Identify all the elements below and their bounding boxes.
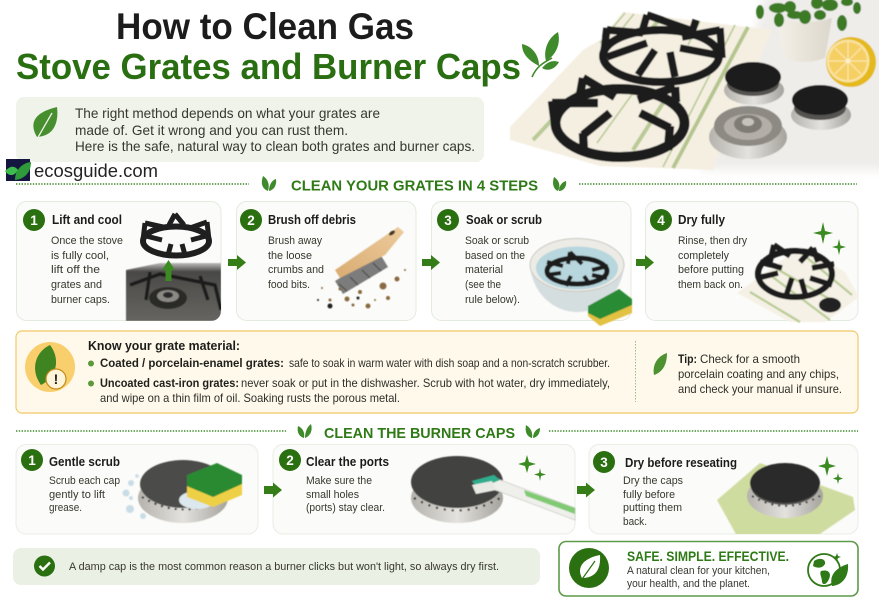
icon: leaf with warning [25,342,75,392]
step description: Dry the caps [623,475,683,487]
bullet: uncoated cast iron: and wipe on a thin film of oil. Soaking rusts the porous metal. [100,392,400,405]
icon: leaf [33,107,57,146]
heading: clean the burner caps: CLEAN THE BURNER CAPS [324,425,515,442]
material heading: Know your grate material: [88,338,240,353]
badge: 3: 3 [444,213,452,228]
badge: 3 [593,451,615,473]
pot [777,18,832,62]
plant [756,0,861,31]
illustration: bowl with grate and sponge [530,238,632,326]
step description [306,475,385,514]
icon: globe with leaf [808,553,848,586]
step description: Brush away [268,235,322,247]
banner text: SAFE. SIMPLE. EFFECTIVE. [627,548,789,564]
step description: putting them [623,502,682,514]
step description: Make sure the [306,475,372,487]
tip text: Check for a smooth [700,353,800,366]
title: Stove Grates and Burner Caps [16,46,521,87]
step description: (ports) stay clear. [306,502,385,514]
tip text: and check your manual if unsure. [678,383,842,396]
step description [51,235,123,306]
heading: clean your grates: CLEAN YOUR GRATES IN 4 STEPS [291,178,538,194]
callout: damp cap note [13,548,540,585]
arrow: up [162,260,175,281]
step description: grease. [49,502,82,514]
lemon [826,37,876,87]
arrow: cap step 1 to 2 [264,482,282,498]
step description: lift off the [51,264,100,276]
towel [510,12,772,170]
step description: food bits. [268,279,310,291]
step description: crumbs and [268,264,324,276]
step description: back. [623,516,647,528]
icon: sparkles [818,456,843,484]
arrow: step 1 to 2 [228,255,246,270]
step description: fully before [623,489,675,501]
step title: Gentle scrub [49,455,120,469]
illustration: burner cap with toothbrush [411,456,575,523]
icon: leaf badge [569,548,609,588]
illustration: brush and crumbs [317,227,406,308]
icon: title leaves [522,32,559,77]
step description: Scrub each cap [49,475,120,487]
burner cap A [724,75,784,105]
banner text: A natural clean for your kitchen, [627,565,770,577]
step description [49,475,120,514]
tip text: porcelain coating and any chips, [678,368,839,381]
panel: cap step 3 dry before reseating [589,444,858,536]
panel: know your grate material [16,331,858,413]
badge: 1: 1 [30,213,38,228]
callout: safe simple effective [559,542,858,596]
badge: 1 [23,209,45,231]
heading: clean the burner caps [16,424,858,442]
panel: intro [16,97,484,162]
step title: Clear the ports [306,455,389,469]
step description: based on the [465,250,525,262]
step description: them back on. [678,279,743,291]
callout: damp cap note: A damp cap is the most common reason a burner clicks but won't light, so always dry first. [69,561,499,573]
badge: 4: 4 [657,213,665,228]
illustration: grate drying on towel [737,245,859,322]
badge: 3 [437,209,459,231]
step description: small holes [306,489,359,501]
panel: step 3 soak or scrub [432,202,632,326]
illustration: burner on green towel [717,463,855,536]
upper grate [603,15,722,82]
panel: cap step 2 clear the ports [273,444,575,534]
badge: 1 [21,449,43,471]
logo: ecosguide.com: ecosguide.com [34,161,158,181]
lower grate [552,78,684,157]
bullet: uncoated cast iron [88,377,610,405]
step description [678,235,747,291]
step description [268,235,324,291]
step description: gently to lift [49,489,106,501]
panel: step 4 dry fully [646,202,859,322]
step description: burner caps. [51,294,110,306]
burner cap B [791,100,851,130]
icon: sparkles [813,222,846,255]
step description: the loose [268,250,312,262]
badge: 4 [650,209,672,231]
intro text: made of. Get it wrong and you can rust them. [75,123,348,138]
step description: Rinse, then dry [678,235,747,247]
intro text: The right method depends on what your grates are [75,106,380,121]
step description: Once the stove [51,235,123,247]
badge: 3: 3 [600,455,608,470]
badge: 1: 1 [28,453,36,468]
arrow: cap step 2 to 3 [577,482,595,498]
intro text [75,106,475,154]
tip text [678,353,842,396]
bullet: uncoated cast iron: Uncoated cast-iron grates: [100,377,239,390]
badge: 2: 2 [247,213,255,228]
icon: check [34,556,55,576]
heading: clean your grates [16,176,857,194]
icon: leaf with warning: ! [54,371,58,387]
arrow: step 2 to 3 [422,255,440,270]
illustration: burner cap with sponge [122,460,242,523]
banner text: your health, and the planet. [627,578,750,590]
arrow: step 3 to 4 [636,255,654,270]
icon: sparkles [518,455,546,481]
bullet: coated grates [88,357,610,370]
step title: Dry before reseating [625,456,737,470]
step description: material [465,264,503,276]
step title: Dry fully [678,213,725,227]
step title: Brush off debris [268,213,356,227]
open burner [709,115,787,159]
step description [465,235,529,306]
bullet: coated grates: Coated / porcelain-enamel grates: [100,357,284,370]
step description: rule below). [465,294,520,306]
icon: tip leaf [654,353,667,375]
step description [623,475,683,528]
step description: Soak or scrub [465,235,529,247]
step description: grates and [51,279,102,291]
step description: is fully cool, [51,250,109,262]
badge: 2 [279,449,301,471]
step title: Soak or scrub [466,213,542,227]
bullet: uncoated cast iron: never soak or put in the dishwasher. Scrub with hot water, dry immediately, [241,377,610,390]
step description: before putting [678,264,744,276]
banner text [627,548,789,590]
bullet: coated grates: safe to soak in warm water with dish soap and a non-scratch scrubber. [289,357,610,370]
panel: step 1 lift and cool [16,202,221,321]
badge: 2 [240,209,262,231]
panel: cap step 1 gentle scrub [16,444,258,534]
step description: completely [678,250,729,262]
badge: 2: 2 [286,453,294,468]
tip text: Tip: [678,353,697,366]
step description: (see the [465,279,501,291]
illustration: stove below lifted grate [126,263,221,321]
illustration: lifted grate [143,214,209,256]
panel: step 2 brush off debris [236,202,416,320]
hero photo: grates, burner caps, towel, lemon and plant [510,0,879,170]
intro text: Here is the safe, natural way to clean both grates and burner caps. [75,139,475,154]
step title: Lift and cool [52,213,122,227]
title [16,6,521,87]
title: How to Clean Gas [116,6,414,47]
